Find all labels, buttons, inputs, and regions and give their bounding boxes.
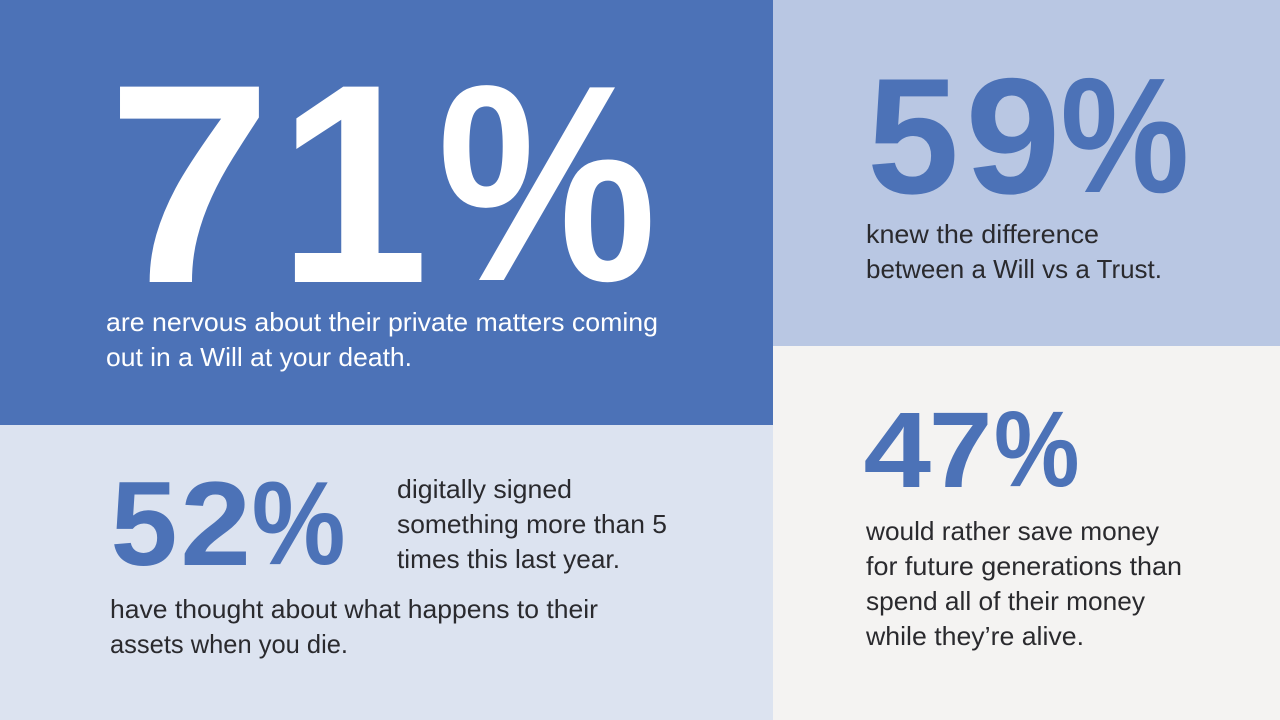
big number: 52% [110, 457, 346, 591]
panel: 47% statistic [773, 346, 1280, 720]
panel: 71% statistic [0, 0, 773, 425]
text: 47% description [865, 516, 1182, 651]
panel: 52% statistic [0, 425, 773, 720]
text: 59% description [866, 219, 1162, 284]
big number: 71%: 1 [278, 26, 429, 343]
text: 47% description: while they’re alive. [865, 621, 1084, 651]
text: 71% description [106, 307, 658, 372]
big number: 71% [107, 26, 657, 343]
text: 52% description: have thought about what happens to their [110, 594, 598, 624]
text: 47% description: would rather save money [865, 516, 1159, 546]
text: digitally signed note: digitally signed [397, 474, 572, 504]
big number: 71%: 7 [107, 26, 272, 343]
big number: 71%: % [437, 28, 657, 340]
big number: 52%: % [252, 457, 346, 590]
big number: 59%: % [1060, 44, 1189, 227]
big number: 59%: 5 [867, 44, 959, 228]
big number: 47%: 7 [929, 389, 992, 510]
text: 59% description: knew the difference [866, 219, 1099, 249]
big number: 47%: % [994, 388, 1080, 509]
big number: 47% [864, 388, 1080, 510]
big number: 47%: 4 [864, 389, 931, 510]
text: 52% description [110, 594, 598, 659]
text: digitally signed note: something more than 5 [397, 509, 667, 539]
text: 47% description: spend all of their money [866, 586, 1145, 616]
text: 71% description: are nervous about their private matters coming [106, 307, 658, 337]
text: 52% description: assets when you die. [110, 629, 348, 659]
text: 59% description: between a Will vs a Trust. [866, 254, 1162, 284]
big number: 59%: 9 [965, 44, 1060, 228]
big number: 52%: 2 [180, 457, 251, 591]
text: 47% description: for future generations than [866, 551, 1182, 581]
big number: 59% [867, 44, 1189, 228]
text: digitally signed note [397, 474, 667, 574]
text: 71% description: out in a Will at your death. [106, 342, 412, 372]
text: digitally signed note: times this last year. [397, 544, 620, 574]
big number: 52%: 5 [110, 457, 178, 591]
panel: 59% statistic [773, 0, 1280, 346]
